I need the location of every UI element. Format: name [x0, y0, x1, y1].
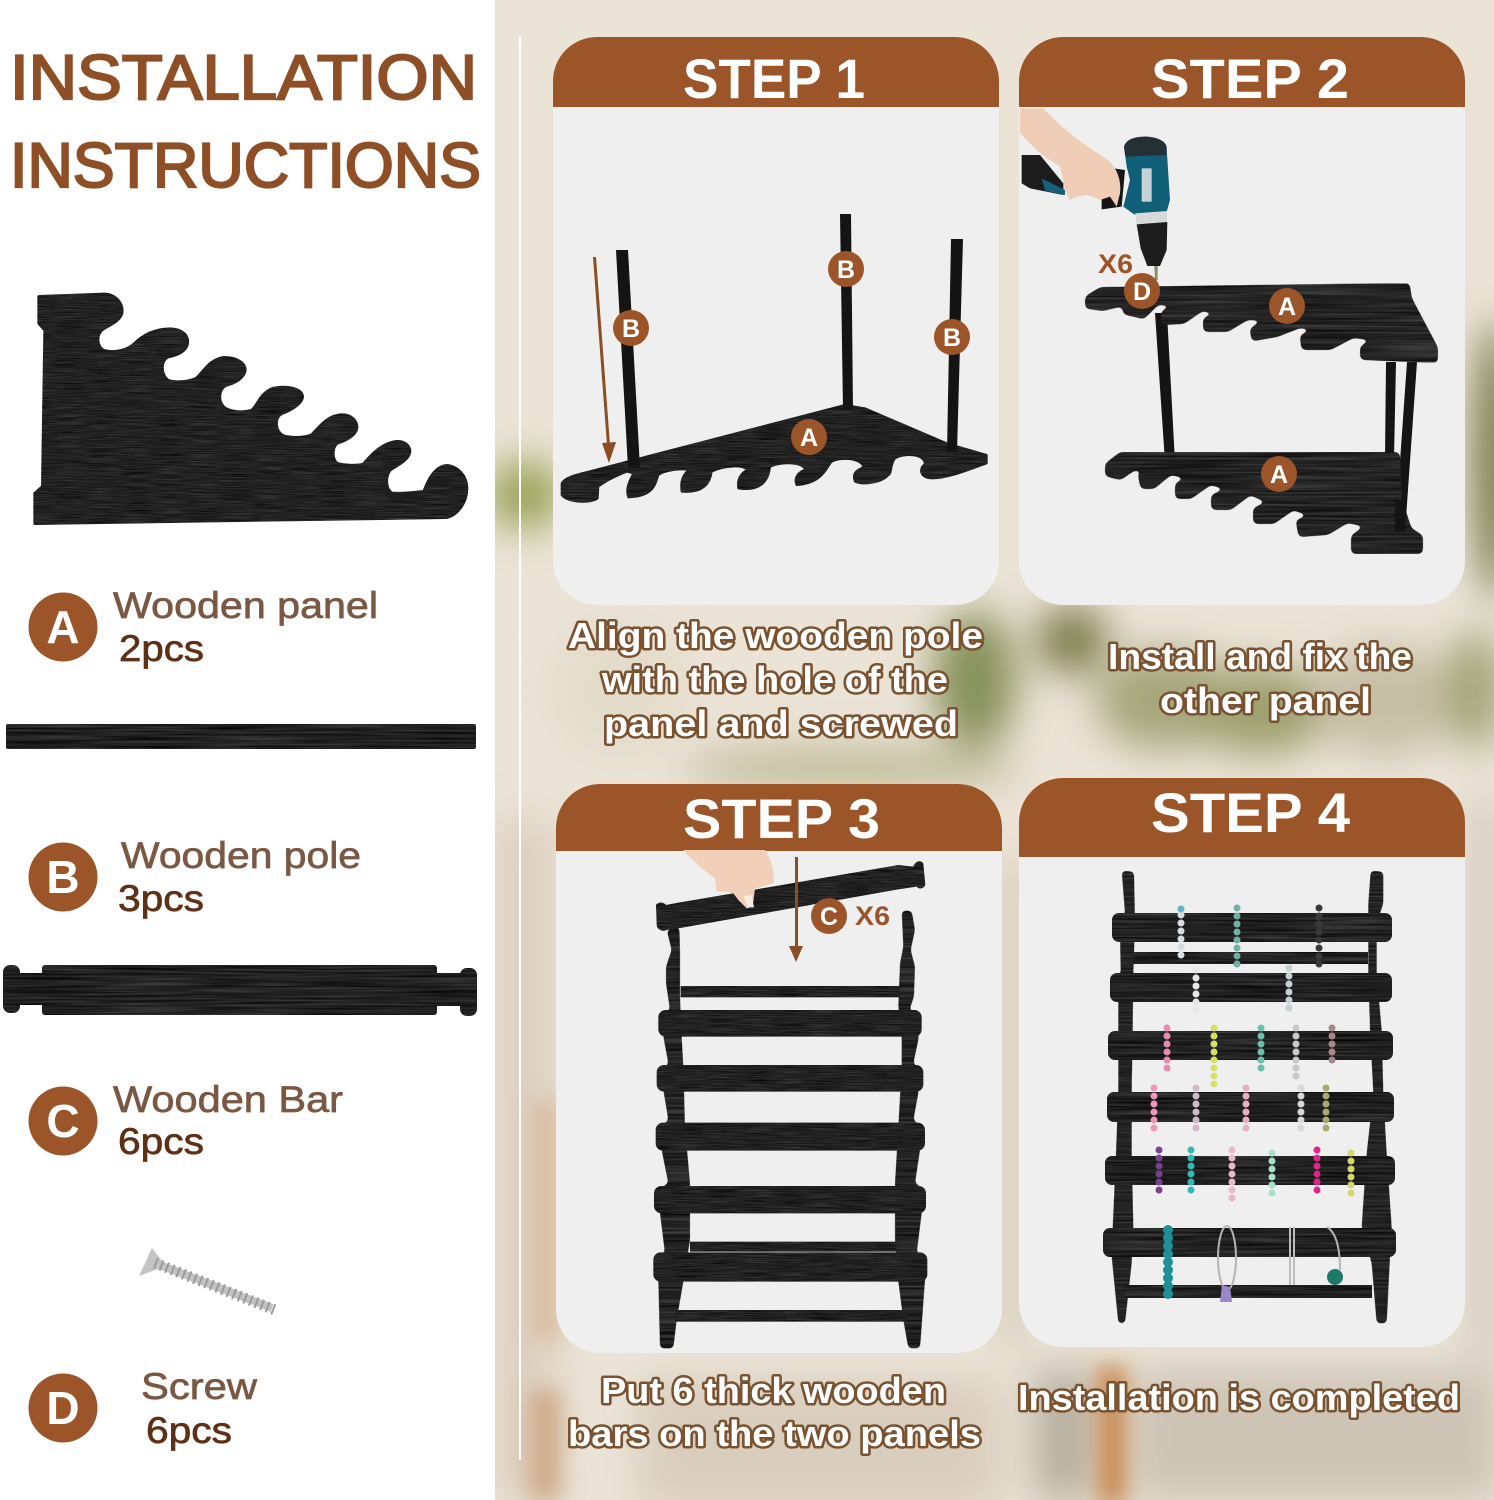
label X6: X6	[855, 901, 890, 931]
label B: B	[622, 315, 640, 343]
panel: step 1	[553, 37, 999, 605]
caption: step 1: Align the wooden pole	[568, 615, 983, 656]
step 1 header	[553, 37, 999, 107]
panel: step 2	[1019, 37, 1465, 605]
part C label: C	[46, 1095, 80, 1147]
title: INSTALLATION	[10, 43, 477, 113]
part A label	[28, 585, 378, 669]
left white column	[0, 0, 495, 1500]
bracelets	[1154, 908, 1351, 1302]
assembled frame	[1088, 286, 1435, 551]
blurred photo background	[487, 0, 1494, 1500]
title: INSTRUCTIONS	[10, 131, 481, 201]
label B: B	[943, 324, 961, 352]
caption: step 3: bars on the two panels	[568, 1413, 981, 1454]
label D: D	[1133, 278, 1151, 306]
caption: step 3: Put 6 thick wooden	[601, 1370, 946, 1411]
part A label: 2pcs	[119, 628, 204, 669]
part D label	[28, 1366, 257, 1451]
label B	[828, 251, 864, 287]
part A label: Wooden panel	[113, 585, 378, 626]
caption: step 1	[568, 615, 983, 744]
caption: step 4: Installation is completed	[1018, 1377, 1460, 1418]
icon: hand with drill	[1020, 108, 1170, 280]
rack frame and bars	[653, 861, 927, 1348]
caption: step 2: other panel	[1160, 680, 1371, 721]
finished rack	[1103, 871, 1396, 1323]
label A	[1261, 456, 1297, 492]
step 3 header	[556, 784, 1002, 851]
label A: A	[800, 424, 818, 452]
caption: step 2	[1108, 636, 1412, 721]
step 4 header	[1019, 778, 1465, 857]
vertical divider	[519, 37, 521, 1460]
base panel with poles	[562, 214, 987, 502]
caption: step 1: panel and screwed	[604, 703, 958, 744]
hand	[683, 850, 774, 908]
part D label: Screw	[141, 1366, 257, 1407]
arrow down	[593, 257, 616, 463]
panel: step 3	[556, 784, 1002, 1353]
part D label: 6pcs	[146, 1410, 232, 1451]
label A	[791, 419, 827, 455]
part B label	[28, 835, 361, 919]
photo: wooden bar	[3, 965, 477, 1016]
part B label: B	[46, 851, 80, 903]
step 3 heading: STEP 3	[683, 787, 880, 850]
step 2 header	[1019, 37, 1465, 107]
label A	[1269, 288, 1305, 324]
part A label: A	[46, 601, 80, 653]
step 1 heading: STEP 1	[683, 47, 865, 110]
label B: B	[837, 256, 855, 284]
label A: A	[1278, 293, 1296, 321]
photo: wooden panel	[35, 294, 467, 523]
part C label: Wooden Bar	[113, 1079, 343, 1120]
photo: wooden pole	[6, 724, 476, 749]
label C: C	[820, 903, 838, 931]
step 2 heading: STEP 2	[1151, 47, 1349, 110]
part C label: 6pcs	[118, 1121, 204, 1162]
panel: step 4	[1019, 778, 1465, 1347]
label B	[934, 319, 970, 355]
caption: step 2: Install and fix the	[1108, 636, 1412, 677]
part C label	[28, 1079, 343, 1162]
label X6: X6	[1098, 249, 1133, 279]
part B label: 3pcs	[118, 878, 204, 919]
label D	[1124, 273, 1160, 309]
arrow down	[789, 857, 803, 962]
part B label: Wooden pole	[121, 835, 361, 876]
step 4 heading: STEP 4	[1151, 781, 1350, 844]
caption: step 1: with the hole of the	[601, 659, 948, 700]
label C	[811, 898, 847, 934]
caption: step 3	[568, 1370, 981, 1454]
photo: screw	[139, 1248, 275, 1310]
label B	[613, 310, 649, 346]
label A: A	[1270, 461, 1288, 489]
part D label: D	[46, 1382, 80, 1434]
title	[10, 43, 481, 201]
